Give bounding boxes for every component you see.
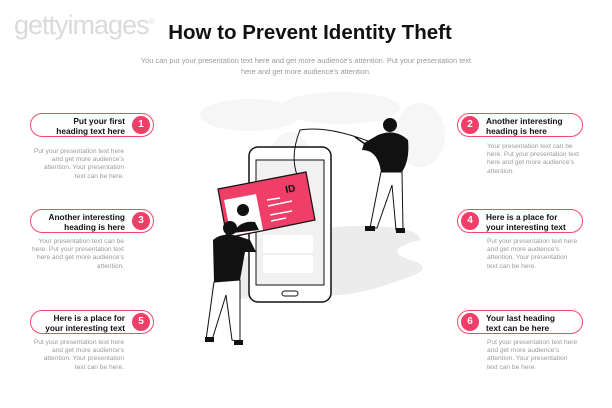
item 4: your interesting text (486, 222, 566, 232)
item 3: 3 (138, 215, 144, 226)
item 1: 1 (138, 119, 144, 130)
item 1: heading text here (56, 126, 125, 136)
ID card (218, 172, 315, 238)
item 2: heading is here (486, 126, 547, 136)
subtitle: You can put your presentation text here and get more audience's attention. Put your presentation text here and get more audience's attention. (141, 56, 471, 76)
item 4: Here is a place for (486, 212, 557, 222)
item 2: 2 (467, 119, 473, 130)
fishing line (294, 129, 378, 175)
person left (205, 221, 256, 345)
item 3: heading is here (64, 222, 125, 232)
item 5: your interesting text (45, 323, 125, 333)
map background (200, 92, 445, 188)
item 1 (30, 113, 154, 180)
item 2: Your presentation text can be here. Put your presentation text here and get more audience's attention. (487, 143, 579, 175)
item 6 (457, 310, 583, 371)
watermark: gettyimages® (14, 10, 153, 40)
item 2: Another interesting (486, 116, 563, 126)
item 1: Put your first (73, 116, 125, 126)
item 1: Put your presentation text here and get more audience's attention. Your presentation text can be here. (34, 148, 124, 180)
item 6: Your last heading (486, 313, 555, 323)
item 5 (30, 310, 154, 371)
item 6: text can be here (486, 323, 549, 333)
title: How to Prevent Identity Theft (168, 21, 452, 44)
item 5: Here is a place for (54, 313, 125, 323)
item 3 (30, 209, 154, 270)
shadow blob (211, 226, 423, 300)
item 4 (457, 209, 583, 270)
phone (249, 147, 331, 302)
item 5: Put your presentation text here and get more audience's attention. Your presentation text can be here. (34, 339, 124, 371)
item 2 (457, 113, 583, 175)
item 3: Another interesting (48, 212, 125, 222)
item 4: Put your presentation text here and get more audience's attention. Your presentation text can be here. (487, 238, 577, 270)
item 4: 4 (467, 215, 473, 226)
ID card: ID (284, 183, 296, 196)
item 3: Your presentation text can be here. Put your presentation text here and get more audience's attention. (32, 238, 124, 270)
fisher (355, 118, 408, 233)
item 6: Put your presentation text here and get more audience's attention. Your presentation text can be here. (487, 339, 577, 371)
item 6: 6 (467, 316, 473, 327)
item 5: 5 (138, 316, 144, 327)
